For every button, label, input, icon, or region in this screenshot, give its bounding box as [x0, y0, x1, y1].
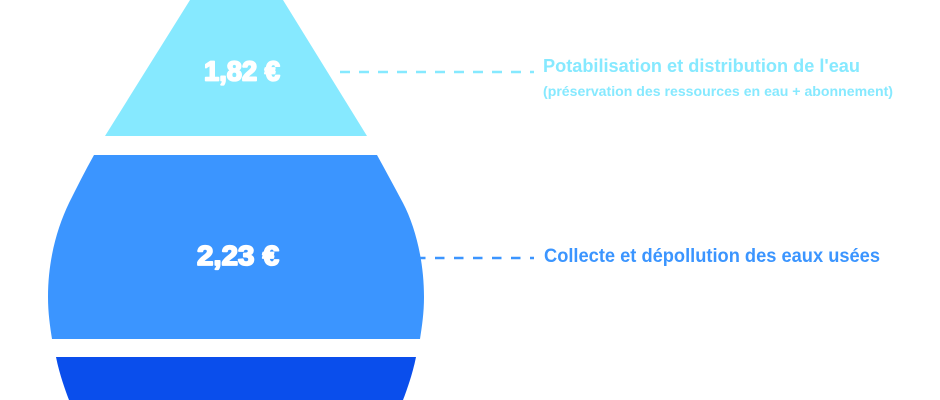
leader line: collecte	[416, 257, 534, 259]
label: collecte: Collecte et dépollution des eaux usées	[544, 246, 880, 267]
drop segment: potabilisation	[105, 0, 367, 136]
label: potabilisation: Potabilisation et distribution de l'eau	[543, 55, 860, 76]
leader line: potabilisation	[340, 71, 534, 73]
label: potabilisation	[543, 55, 893, 99]
drop segment: collecte et dépollution	[48, 155, 424, 339]
value: 2,23 €: 2,23 €	[197, 240, 279, 271]
value: 1,82 €: 1,82 €	[204, 56, 280, 86]
label detail: (préservation des ressources en eau + abonnement)	[543, 83, 893, 99]
drop segment: bottom dark band	[56, 357, 416, 400]
